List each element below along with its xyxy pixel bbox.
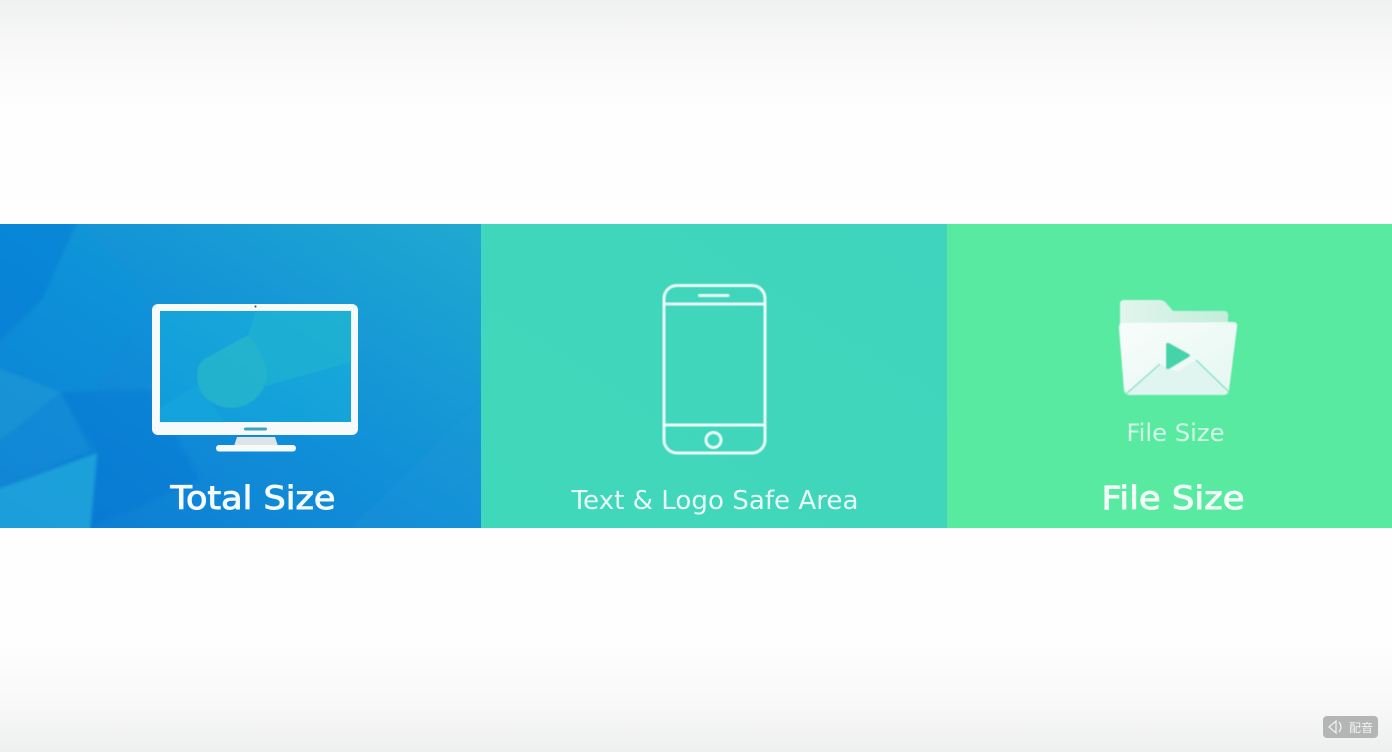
- icon: video folder: [1119, 300, 1237, 395]
- watermark badge: [1323, 716, 1378, 738]
- text: file size small label: File Size: [1126, 419, 1224, 447]
- icon: desktop monitor: [152, 304, 358, 452]
- heading: total size: Total Size: [169, 479, 336, 517]
- panel: file size: [947, 224, 1392, 528]
- panel: total size: [0, 220, 481, 535]
- heading: file size: File Size: [1102, 479, 1244, 517]
- panel: text and logo safe area: [481, 224, 947, 528]
- text: safe area label: Text & Logo Safe Area: [570, 486, 858, 516]
- icon: smartphone outline: [664, 286, 765, 453]
- watermark badge: 配音: [1349, 719, 1373, 736]
